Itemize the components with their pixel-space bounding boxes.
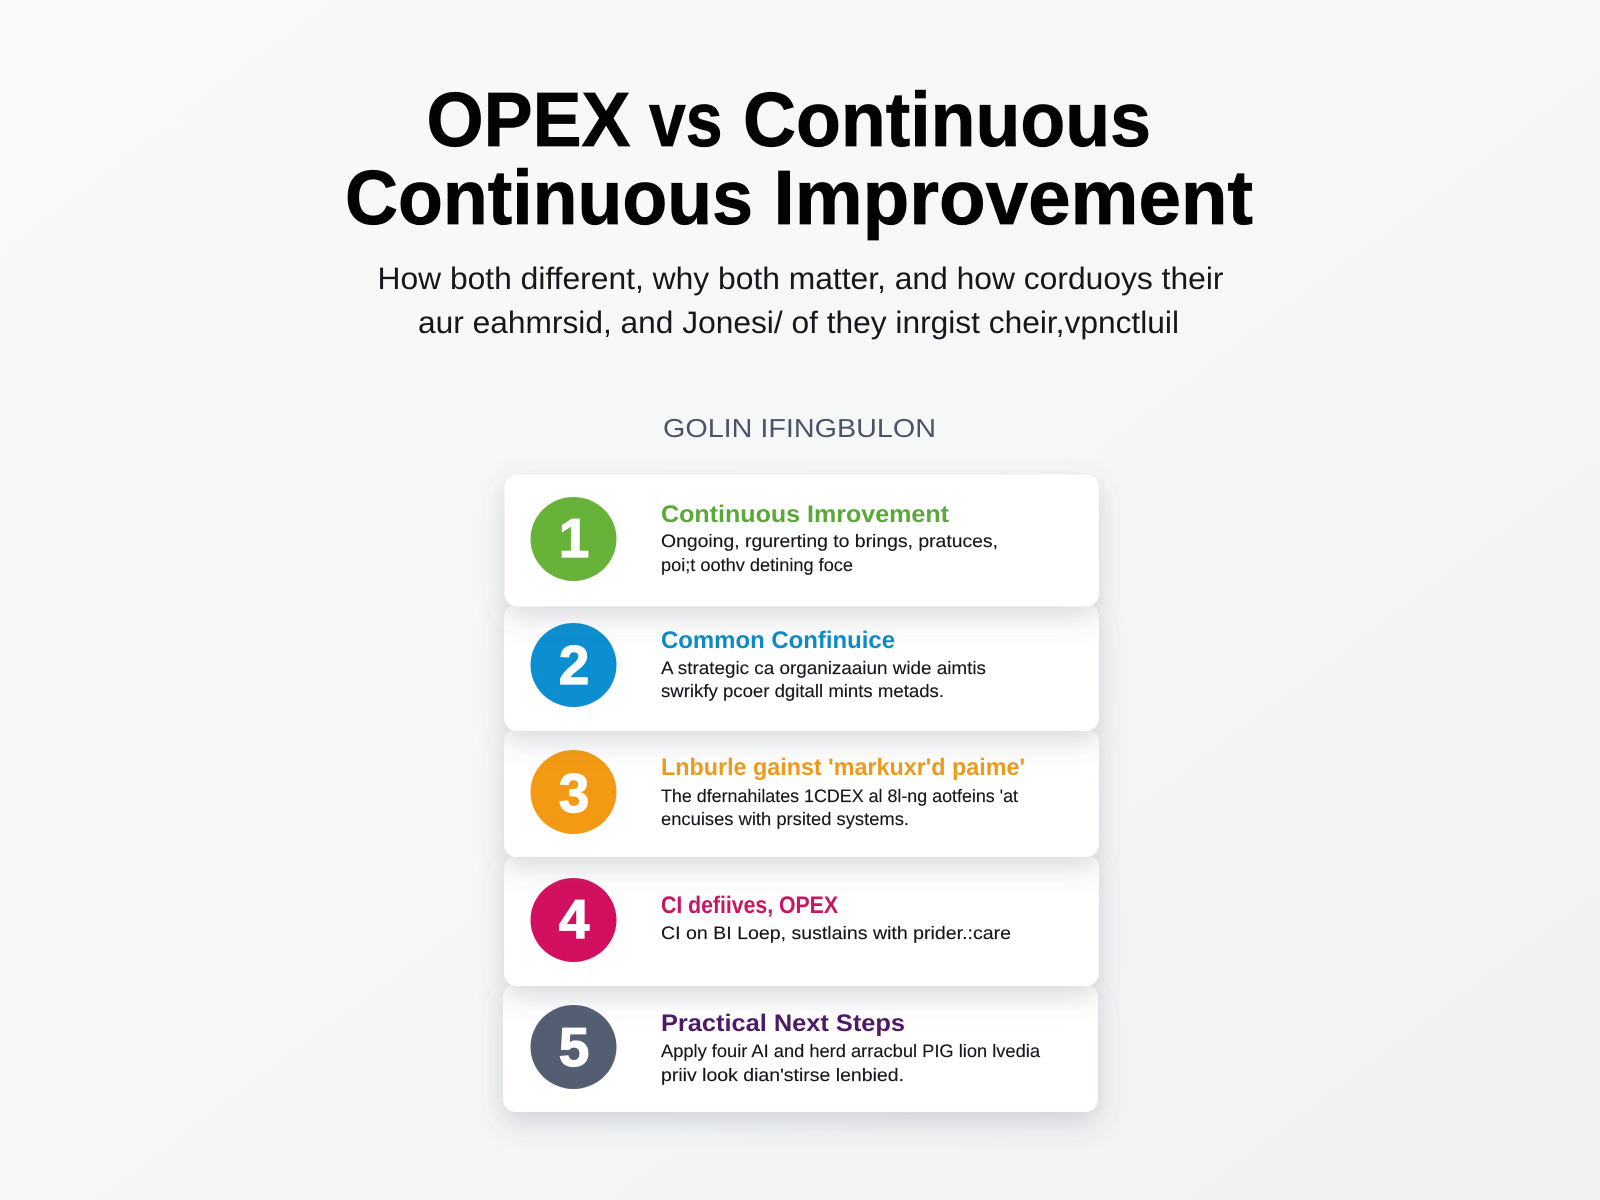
- icon: number 5 badge: [530, 1005, 616, 1089]
- step 3 description: The dfernahilates 1CDEX al 8l-ng aotfeins 'at: [661, 786, 1018, 806]
- section label: GOLIN IFINGBULON: [663, 413, 936, 443]
- icon: number 1 badge: [530, 497, 616, 581]
- step 4 heading: CI defiives, OPEX: [661, 892, 838, 919]
- step 3 description: encuises with prsited systems.: [661, 809, 909, 829]
- icon: number 3 badge: 3: [559, 762, 589, 824]
- title: Improvement: [774, 155, 1253, 241]
- step 1 heading: Continuous Imrovement: [661, 501, 949, 528]
- step 2 description: [661, 658, 986, 701]
- subtitle: How both different, why both matter, and how corduoys their: [378, 261, 1224, 296]
- panel: step 1 card: [504, 474, 1099, 606]
- icon: number 4 badge: [530, 878, 616, 962]
- icon: number 1 badge: 1: [559, 507, 589, 569]
- step 2 heading: Common Confinuice: [661, 627, 895, 654]
- step 1 description: Ongoing, rgurerting to brings, pratuces,: [661, 531, 998, 551]
- step 5 heading: Practical Next Steps: [661, 1010, 905, 1037]
- step 1 description: [661, 531, 998, 575]
- panel: step 3 card: [504, 729, 1099, 857]
- panel: step 4 card: [504, 855, 1099, 986]
- step 5 description: [661, 1041, 1041, 1085]
- title: Continuous: [345, 155, 753, 241]
- icon: number 4 badge: 4: [559, 888, 590, 950]
- panel: step 2 card: [504, 604, 1099, 731]
- icon: number 5 badge: 5: [559, 1016, 589, 1078]
- panel: step 5 card: [503, 984, 1098, 1112]
- title: vs: [649, 77, 722, 163]
- step 5 description: Apply fouir AI and herd arracbul PIG lion lvedia: [661, 1041, 1041, 1061]
- step 5 description: priiv look dian'stirse lenbied.: [661, 1065, 904, 1085]
- step 2 description: swrikfy pcoer dgitall mints metads.: [661, 681, 944, 701]
- step 1 description: poi;t oothv detining foce: [661, 555, 853, 575]
- step 2 description: A strategic ca organizaaiun wide aimtis: [661, 658, 986, 678]
- step 4 description: CI on BI Loep, sustlains with prider.:care: [661, 923, 1011, 943]
- icon: number 3 badge: [530, 750, 616, 834]
- title: OPEX: [426, 77, 630, 163]
- icon: number 2 badge: [530, 623, 616, 707]
- subtitle: aur eahmrsid, and Jonesi/ of they inrgist cheir,vpnctluil: [418, 305, 1179, 340]
- step 3 description: [661, 786, 1018, 829]
- title: Continuous: [743, 77, 1151, 163]
- step 3 heading: Lnburle gainst 'markuxr'd paime': [661, 754, 1025, 781]
- icon: number 2 badge: 2: [559, 634, 589, 696]
- title: [345, 77, 1253, 241]
- subtitle: [378, 261, 1224, 340]
